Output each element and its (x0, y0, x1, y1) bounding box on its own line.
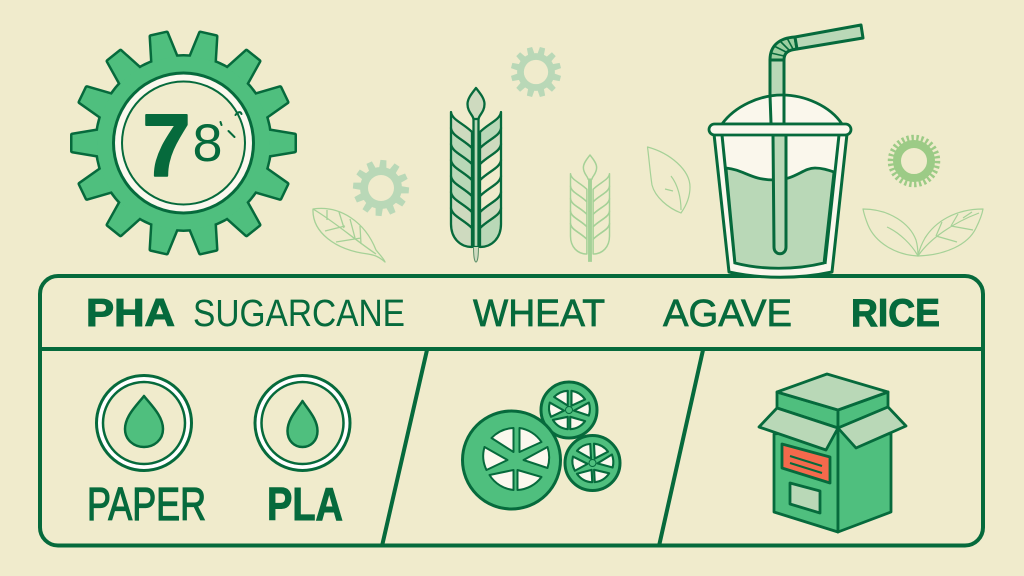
box window (790, 483, 820, 513)
icon: leaf left (313, 208, 385, 262)
straw lower (773, 135, 786, 254)
icon: cardboard box (759, 374, 906, 532)
icon: PLA drop badge (255, 376, 350, 470)
left kernels (451, 112, 472, 247)
label: PAPER: PAPER (87, 478, 206, 530)
liquid (726, 168, 834, 268)
panel: table frame (40, 276, 983, 546)
icon: pale gear top (507, 43, 565, 101)
icon: three meshing wheels (462, 382, 620, 509)
icon: large gear with 78 (72, 32, 294, 254)
icon: large wheat (451, 88, 501, 262)
label: AGAVE: AGAVE (663, 293, 792, 335)
icon: pale gear left (353, 160, 409, 216)
box lid (759, 374, 906, 450)
label: RICE: RICE (851, 292, 940, 335)
right kernels (480, 112, 501, 247)
box red label (782, 444, 830, 483)
straw upper (770, 25, 863, 100)
icon: cup with straw (709, 25, 863, 277)
box body (774, 428, 891, 532)
label: PHA: PHA (86, 292, 175, 335)
label: PLA: PLA (267, 478, 343, 530)
wheel large (462, 411, 560, 509)
number 78: 8 (192, 114, 222, 173)
lid rim (709, 124, 851, 135)
icon: paper drop badge (96, 376, 192, 470)
icon: twin leaves (863, 209, 983, 256)
icon: small pale wheat (570, 155, 610, 262)
wheel right (565, 436, 620, 490)
icon: sunburst ring (892, 138, 936, 184)
wheel top (541, 382, 597, 438)
label: WHEAT: WHEAT (473, 293, 605, 335)
number 78: 7 (142, 96, 190, 195)
cup shell (714, 134, 847, 277)
label: SUGARCANE: SUGARCANE (193, 293, 405, 335)
icon: leaf centre right (648, 147, 690, 213)
dome lid (722, 95, 842, 124)
heading row: material names (86, 292, 940, 335)
number 78 (142, 96, 242, 195)
